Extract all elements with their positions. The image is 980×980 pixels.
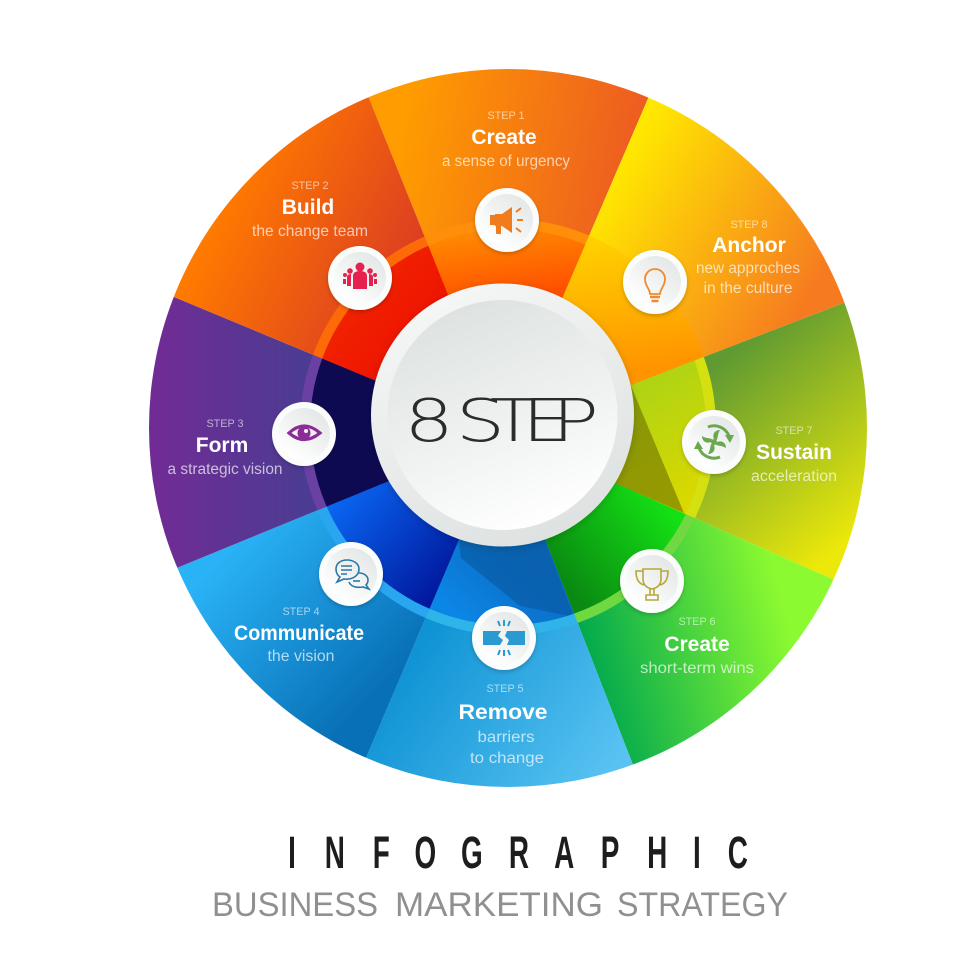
disc rim (371, 284, 634, 546)
step 1 text (442, 110, 570, 170)
inner wedge: step 6 (545, 483, 686, 614)
step 5 text: Remove (458, 701, 548, 724)
heading: INFOGRAPHIC: INFOGRAPHIC (288, 827, 748, 878)
subtitle: MARKETING (395, 886, 603, 924)
subtitle (212, 886, 788, 924)
shadow facet: step 7 (610, 386, 684, 513)
inner wedge: step 5 (430, 539, 574, 624)
inner wedge: step 1 (429, 232, 586, 298)
step 1 text: Create (471, 126, 537, 149)
icon: speech bubbles (319, 542, 383, 606)
inner wedge: step 7 (630, 360, 706, 514)
center label: 8 STEP (404, 387, 599, 456)
inner wedges (312, 232, 706, 624)
step 8 text: new approches (696, 260, 800, 277)
icon: eye (272, 402, 336, 466)
outer wedges (149, 69, 867, 787)
icon: light bulb (623, 250, 687, 314)
inner wedge: step 4 (326, 481, 460, 609)
step 2 text: STEP 2 (291, 180, 329, 192)
step 3 text (168, 418, 282, 478)
ring segment: step 8 (585, 236, 704, 377)
icon: team (328, 246, 392, 310)
wedge: step 6 (574, 514, 834, 764)
icon: megaphone (475, 188, 539, 252)
step 4 text: Communicate (234, 622, 364, 645)
step 4 text (234, 606, 364, 665)
step 6 text: Create (664, 633, 730, 656)
step 6 text: STEP 6 (678, 616, 716, 628)
inner wedge: step 2 (322, 246, 448, 381)
step 3 text: Form (196, 434, 248, 457)
ring segment: step 1 (424, 222, 589, 246)
step 4 text: the vision (268, 648, 334, 665)
ring segment: step 7 (642, 357, 716, 518)
wedge: step 5 (366, 608, 633, 787)
step 8 text: STEP 8 (730, 219, 768, 231)
title (212, 827, 788, 924)
center disc (371, 284, 634, 546)
step 8 text (696, 219, 800, 297)
step 5 text: barriers (478, 729, 535, 746)
ring segment: step 3 (302, 354, 388, 510)
icon: trophy (620, 549, 684, 613)
step 5 text: STEP 5 (486, 683, 524, 695)
subtitle: BUSINESS (212, 886, 378, 924)
subtitle: STRATEGY (617, 886, 788, 924)
step 7 text: Sustain (756, 441, 832, 464)
step 8 text: Anchor (712, 234, 786, 257)
step 6 text (640, 616, 754, 677)
ring segment: step 5 (426, 540, 578, 633)
icon: broken barrier (472, 606, 536, 670)
wedge: step 1 (368, 69, 648, 246)
wedge: step 7 (686, 302, 867, 580)
ring band (302, 222, 716, 633)
step 2 text: the change team (252, 223, 368, 240)
wedge: step 8 (585, 98, 844, 360)
step 8 text: in the culture (704, 280, 792, 297)
step 6 text: short-term wins (640, 660, 754, 677)
step 1 text: a sense of urgency (442, 153, 570, 170)
wheel of eight colored steps (149, 69, 867, 787)
icon: turbine (682, 410, 746, 474)
shadow facet: step 5 (459, 540, 574, 617)
step 3 text: STEP 3 (206, 418, 244, 430)
wedge: step 3 (149, 296, 326, 568)
ring segment: step 2 (313, 236, 428, 380)
step 2 text: Build (282, 196, 334, 219)
step 5 text (458, 683, 548, 767)
inner wedge: step 8 (562, 246, 694, 385)
disc face (388, 300, 618, 530)
wedge: step 4 (177, 506, 430, 758)
step 5 text: to change (470, 750, 544, 767)
ring segment: step 6 (546, 510, 695, 623)
step 2 text (252, 180, 368, 240)
step 1 text: STEP 1 (487, 110, 525, 122)
step 3 text: a strategic vision (168, 461, 282, 478)
step 7 text (751, 425, 837, 485)
inner wedge: step 3 (312, 358, 389, 506)
wedge: step 2 (174, 97, 428, 358)
step 4 text: STEP 4 (282, 606, 320, 618)
ring segment: step 4 (318, 506, 430, 618)
step 7 text: STEP 7 (775, 425, 813, 437)
step 7 text: acceleration (751, 468, 837, 485)
